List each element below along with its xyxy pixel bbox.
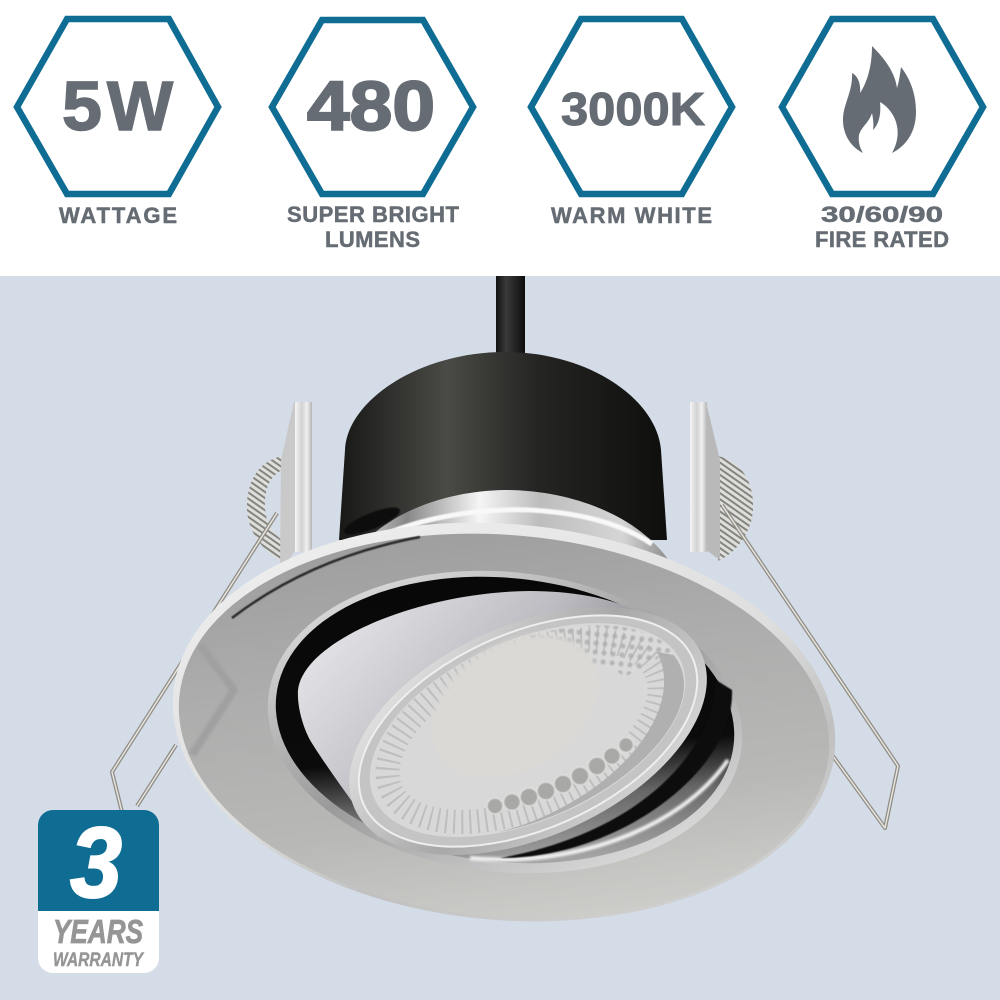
collar bright band [350, 510, 652, 553]
shaded reflector edge [456, 645, 715, 840]
spec: lumens: 480 [307, 67, 435, 145]
panel: product backdrop [0, 276, 1000, 1000]
badge blue top [38, 810, 159, 911]
warranty badge [38, 807, 159, 973]
product: tilting downlight [112, 276, 898, 948]
lens assembly [311, 557, 745, 905]
dark crescent under lens [500, 680, 732, 858]
central diffuser [406, 606, 624, 806]
chrome collar [340, 490, 672, 600]
rim dark reflection [232, 537, 420, 618]
spec: colour temperature: WARM WHITE [551, 203, 712, 228]
reflector [338, 580, 718, 881]
reflector mesh [501, 583, 675, 718]
LED bumps [487, 738, 634, 814]
black inner recess [261, 555, 749, 885]
reflector ribs [360, 602, 687, 859]
warranty years: YEARS [53, 913, 143, 950]
black driver housing [339, 352, 667, 540]
spec: wattage: WATTAGE [59, 203, 177, 228]
cable [496, 276, 525, 356]
icon: flame [843, 46, 916, 153]
left retaining clip [280, 402, 312, 570]
spec: fire rating: 30/60/90 [821, 202, 943, 227]
spec: fire rating: FIRE RATED [815, 227, 949, 252]
warranty number: 3 [70, 807, 122, 919]
right retaining clip [690, 402, 720, 560]
spec: wattage: W [107, 67, 173, 145]
inner lip [253, 548, 757, 896]
outer chrome bezel [311, 557, 745, 905]
spec: lumens: LUMENS [325, 227, 420, 252]
spec: lumens: SUPER BRIGHT [287, 202, 460, 227]
flange chevron mark [192, 645, 234, 755]
left spring coil [247, 456, 282, 561]
spec: wattage [17, 19, 218, 228]
flange face [163, 507, 845, 945]
chrome lower highlight [470, 760, 728, 860]
spec: colour temperature: 3000K [561, 83, 705, 135]
flange rim [156, 496, 852, 948]
swivel body [298, 591, 665, 845]
glass ring [324, 568, 732, 894]
spec: colour temperature [531, 19, 732, 228]
spec: fire rating [782, 19, 983, 252]
left spring wire [112, 513, 277, 812]
right spring wire [722, 505, 898, 828]
badge white base [38, 810, 159, 973]
collar dark highlight [341, 502, 403, 540]
right spring coil [718, 456, 753, 561]
spec: wattage: 5 [62, 67, 102, 145]
spec: lumens [272, 20, 473, 252]
warranty label: WARRANTY [53, 950, 145, 971]
